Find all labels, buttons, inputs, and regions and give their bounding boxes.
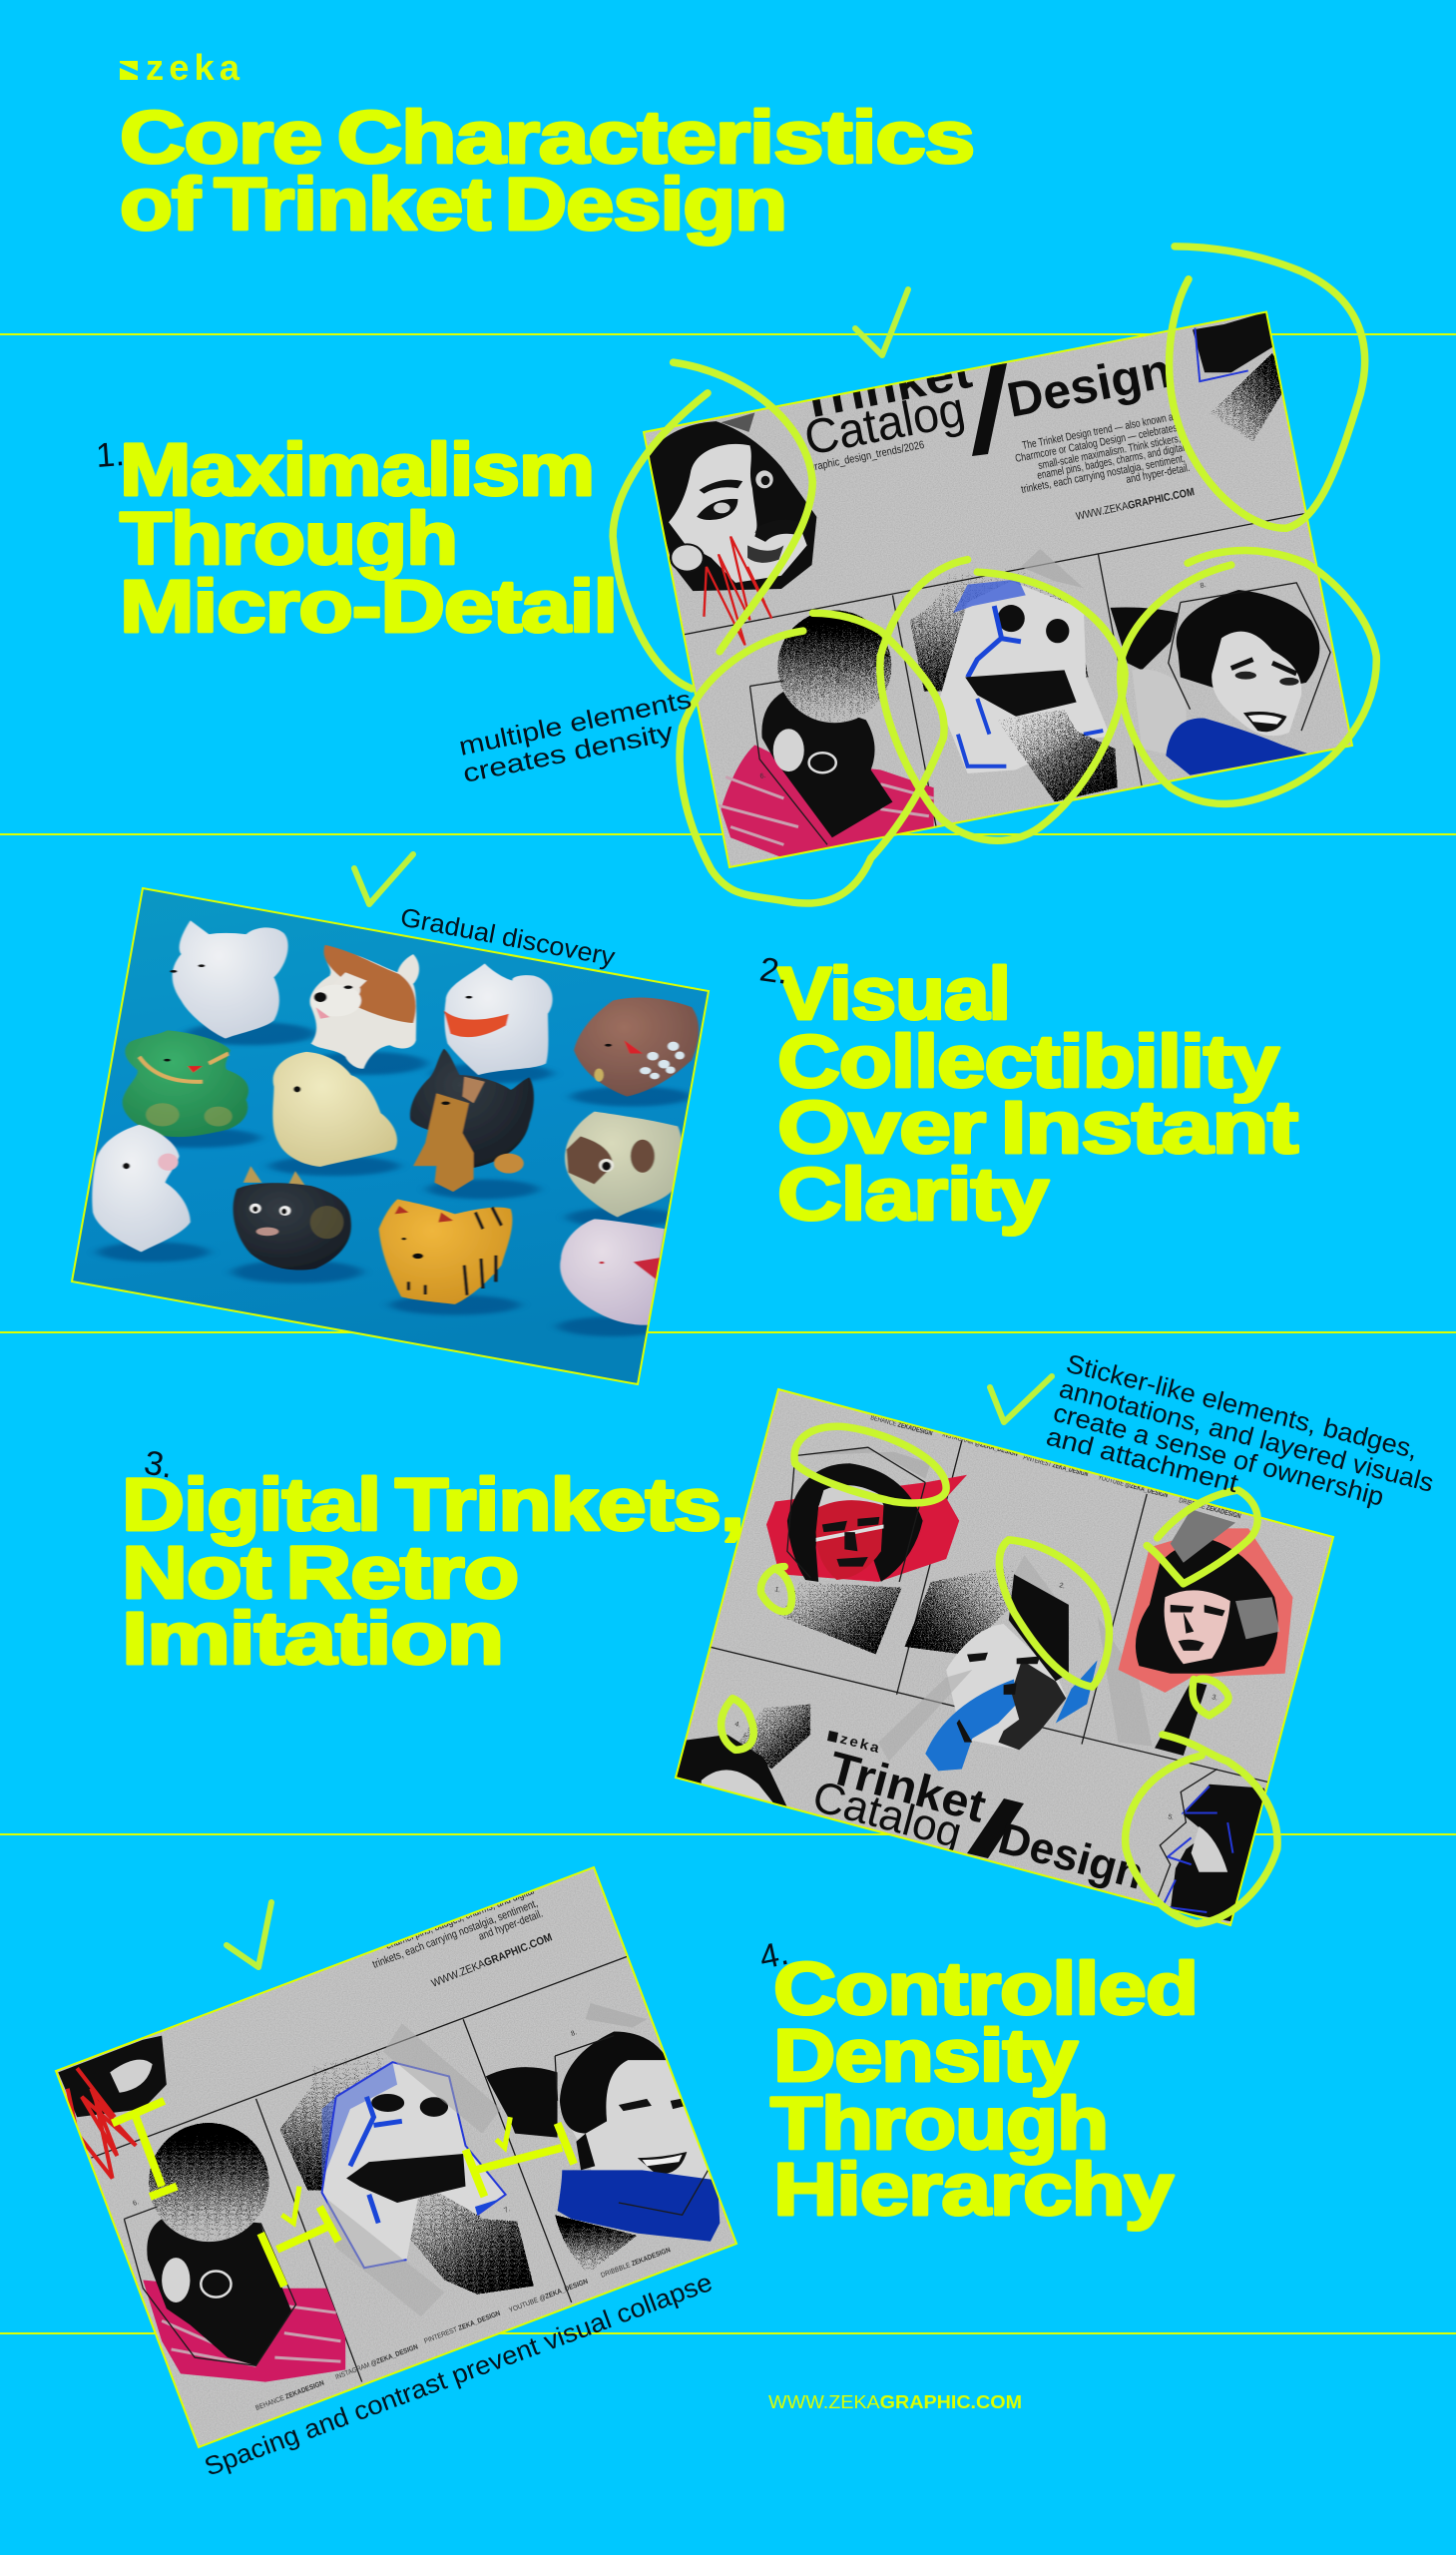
- annotation: spacing and contrast: Spacing and contrast prevent visual collapse: [201, 2267, 717, 2482]
- annotation: sticker-like elements: create a sense of ownership: [1050, 1397, 1387, 1512]
- heading: section 4: Hierarchy: [773, 2148, 1174, 2231]
- heading: section 4: [756, 1934, 1198, 2231]
- title: [120, 96, 974, 246]
- poster 3 wordmark: Catalog: [807, 1772, 967, 1858]
- heading: section 2: 2.: [757, 950, 790, 992]
- annotation: sticker-like elements: and attachment: [1044, 1421, 1242, 1498]
- heading: section 2: Clarity: [777, 1153, 1049, 1236]
- panel: poster 1, micro-detail collage: [639, 304, 1357, 873]
- annotation: multiple elements: creates density: [460, 717, 676, 788]
- poster 1 wordmark: Design: [1003, 343, 1176, 428]
- poster 1 border: [644, 311, 1352, 867]
- annotation: multiple elements: multiple elements: [456, 684, 694, 762]
- poster 1 wordmark: [806, 361, 1168, 471]
- heading: section 4: Density: [773, 2014, 1078, 2097]
- heading: section 2: Over Instant: [777, 1086, 1297, 1169]
- heading: section 4: Through: [770, 2082, 1108, 2165]
- poster 3 social handles: BEHANCE ZEKADESIGN: [869, 1414, 933, 1437]
- panel: poster 3, digital trinkets collage: [669, 1382, 1342, 1931]
- poster 3 social handles: 1.: [773, 1586, 781, 1594]
- poster 1 body copy: 8.: [1200, 582, 1207, 590]
- toy: cream bird: [272, 1052, 397, 1167]
- heading: section 1: Through: [120, 497, 457, 580]
- poster 1 body copy: [759, 410, 1207, 780]
- poster 3 border: [676, 1389, 1333, 1925]
- poster 1 body copy: 6.: [759, 772, 766, 780]
- poster 3 social handles: 2.: [1058, 1582, 1066, 1590]
- heading: section 3: [122, 1443, 743, 1680]
- toy: pink rabbit: [560, 1219, 665, 1325]
- heading: section 1: 1.: [95, 435, 126, 475]
- poster 4 body copy: 6.: [132, 2199, 140, 2208]
- scribbled rings: section 1: [613, 247, 1376, 903]
- check mark 2: [354, 854, 413, 904]
- toy: pug: [565, 1112, 683, 1218]
- poster 1 wordmark: graphic_design_trends/2026: [808, 439, 925, 474]
- toy: white spitz: [173, 920, 288, 1039]
- toy: white figure with red bib: [444, 963, 553, 1075]
- poster 3 social handles: YOUTUBE @ZEKA_DESIGN: [1097, 1474, 1169, 1499]
- poster 3 social handles: 3.: [1211, 1694, 1218, 1702]
- poster 3 social handles: INSTAGRAM @ZEKA_DESIGN: [941, 1431, 1019, 1458]
- poster 3 wordmark: Design: [993, 1813, 1149, 1899]
- heading: section 1: Micro-Detail: [120, 565, 617, 648]
- poster 1 body copy: and hyper-detail.: [1125, 462, 1191, 486]
- poster 3 social handles: 5.: [1167, 1813, 1175, 1821]
- heading: section 3: 3.: [142, 1443, 176, 1486]
- poster 3 social handles: PINTEREST ZEKA_DESIGN: [1022, 1454, 1089, 1478]
- poster 4 social handles: DRIBBBLE ZEKADESIGN: [600, 2247, 672, 2280]
- heading: section 2: Collectibility: [777, 1020, 1279, 1103]
- toy: black and tan shepherd: [410, 1049, 534, 1192]
- poster 1 body copy: trinkets, each carrying nostalgia, sentiment,: [1020, 453, 1187, 496]
- title: Core Characteristics: [120, 96, 974, 179]
- poster 3 wordmark: Trinket: [823, 1741, 991, 1832]
- poster 4 social handles: INSTAGRAM @ZEKA_DESIGN: [334, 2343, 419, 2381]
- poster 3 social handles: DRIBBBLE ZEKADESIGN: [1178, 1497, 1241, 1520]
- poster 3 wordmark: [815, 1731, 1141, 1888]
- panel: photo of collectible toy figures: [72, 888, 709, 1384]
- poster 3 wordmark: zeka: [838, 1730, 883, 1757]
- poster 3 social handles: 4.: [733, 1721, 741, 1729]
- heading: section 3: Digital Trinkets,: [122, 1463, 743, 1546]
- poster 4 social handles: PINTEREST ZEKA_DESIGN: [423, 2310, 501, 2345]
- poster 4 body copy: WWW.ZEKAGRAPHIC.COM: [430, 1931, 554, 1990]
- toy eyes: [123, 964, 612, 1259]
- poster 1 wordmark: Trinket: [794, 342, 976, 430]
- toy: black ox: [234, 1166, 351, 1271]
- heading: section 2: [757, 950, 1297, 1236]
- poster 4 body copy: 7.: [503, 2206, 511, 2215]
- poster 4 body copy: and hyper-detail.: [477, 1908, 545, 1943]
- annotation: sticker-like elements: annotations, and layered visuals: [1057, 1373, 1437, 1498]
- poster 4 body copy: 8.: [570, 2029, 578, 2038]
- poster 1 body copy: Charmcore or Catalog Design — celebrates: [1014, 422, 1179, 465]
- annotation: sticker-like elements: [1044, 1348, 1437, 1512]
- annotation: multiple elements: [456, 684, 694, 788]
- heading: section 2: Visual: [777, 952, 1010, 1035]
- poster 4 body copy: enamel pins, badges, charms, and digital: [384, 1885, 536, 1952]
- poster 4 social handles: [254, 2247, 672, 2412]
- poster 3 social handles: [733, 1414, 1241, 1821]
- heading: section 1: Maximalism: [120, 428, 594, 511]
- check mark 4: [227, 1902, 271, 1967]
- annotation: gradual discovery: Gradual discovery: [398, 901, 618, 972]
- toy: green dragon: [123, 1030, 248, 1137]
- heading: section 3: Imitation: [122, 1597, 503, 1680]
- heading: section 1: [95, 428, 617, 648]
- check mark 3: [990, 1376, 1052, 1422]
- poster 4 border: [56, 1867, 736, 2447]
- check mark 1: [855, 289, 908, 355]
- annotation: sticker-like elements: Sticker-like elements, badges,: [1064, 1348, 1421, 1464]
- toy photo border: [72, 888, 709, 1384]
- poster 1 body copy: enamel pins, badges, charms, and digital: [1036, 442, 1186, 482]
- heading: section 4: Controlled: [773, 1947, 1198, 2030]
- poster 4 social handles: YOUTUBE @ZEKA_DESIGN: [508, 2279, 589, 2314]
- heading: section 3: Not Retro: [122, 1531, 518, 1614]
- poster 1 body copy: WWW.ZEKAGRAPHIC.COM: [1075, 486, 1196, 523]
- spacing measure bars: [113, 2101, 574, 2287]
- heading: section 4: 4.: [756, 1934, 791, 1977]
- poster 4 social handles: BEHANCE ZEKADESIGN: [254, 2380, 325, 2412]
- poster 4 body copy: [132, 1885, 578, 2215]
- toy: white mouse: [92, 1125, 191, 1252]
- scribbled rings: section 3: [722, 1426, 1277, 1923]
- poster 1 body copy: The Trinket Design trend — also known as: [1021, 410, 1179, 452]
- toy: yellow tiger: [379, 1199, 512, 1304]
- toy: brown and white dog: [310, 945, 419, 1069]
- panel: poster 4, controlled density collage: [50, 1861, 743, 2455]
- toy: brown bird: [574, 998, 699, 1097]
- logo: zeka: zeka: [146, 47, 244, 88]
- title: of Trinket Design: [120, 163, 786, 246]
- poster 1 body copy: small-scale maximalism. Think stickers,: [1037, 433, 1182, 472]
- footer url: WWW.ZEKA GRAPHIC.COM: [768, 2392, 1022, 2412]
- poster 1 wordmark: Catalog: [800, 382, 969, 466]
- poster 4 body copy: trinkets, each carrying nostalgia, sentiment,: [371, 1897, 540, 1971]
